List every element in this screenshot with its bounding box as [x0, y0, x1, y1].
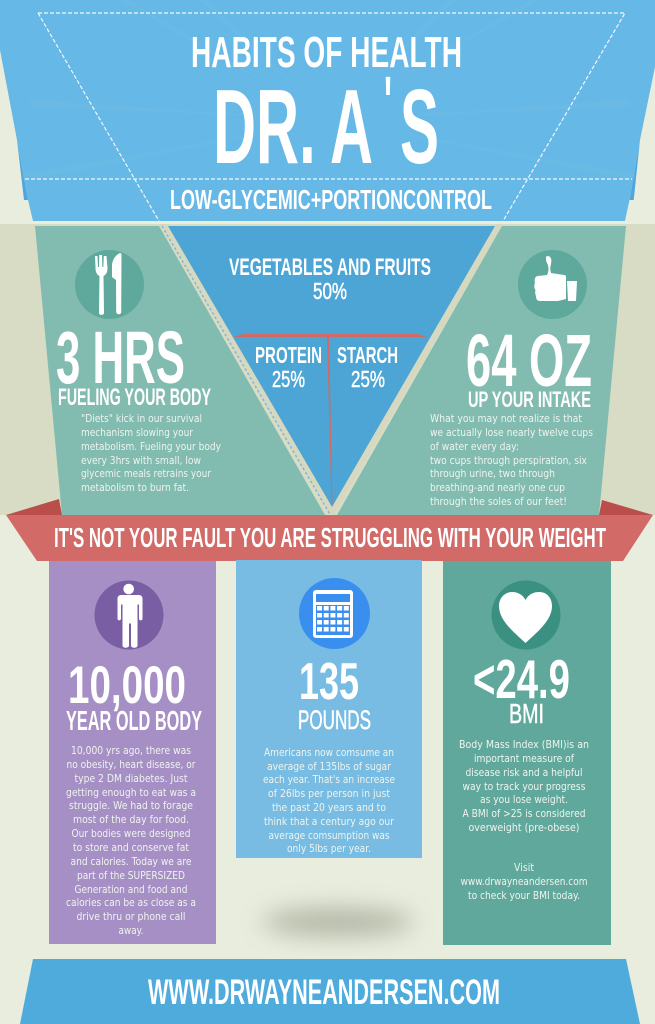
body text: most of the day for food. [73, 814, 189, 826]
stat: 3 hrs: 3 HRS [56, 316, 185, 399]
plate triangle chart [159, 224, 503, 518]
title: Dr. A's: DR. A [213, 68, 373, 186]
divider lines [233, 334, 427, 505]
body text: breathing-and nearly one cup [430, 482, 565, 494]
body text [430, 413, 593, 508]
body text: average of 135lbs of sugar [267, 761, 392, 773]
label: protein: 25% [272, 366, 305, 392]
panel: 135 pounds [236, 560, 422, 858]
body text: Our bodies were designed [72, 828, 190, 840]
header banner [0, 0, 655, 221]
panel: 10,000 year old body [49, 561, 216, 944]
body text: mechanism slowing your [81, 427, 194, 439]
title: Dr. A's: ' [384, 63, 392, 143]
body text: drive thru or phone call [76, 911, 186, 923]
heading: fueling your body: FUELING YOUR BODY [58, 384, 211, 411]
body text: getting enough to eat was a [66, 787, 196, 799]
body text: through urine, two through [430, 468, 555, 480]
body text [66, 745, 196, 937]
body text: no obesity, heart disease, or [66, 759, 196, 771]
body text: of water every day: [430, 441, 519, 453]
body text [263, 747, 395, 855]
body text: to check your BMI today. [468, 890, 580, 902]
body text: way to track your progress [462, 781, 586, 793]
body text: A BMI of >25 is considered [462, 808, 586, 820]
icon: heart [492, 580, 560, 650]
label: vegetables and fruits: 50% [313, 278, 347, 304]
footer banner [20, 959, 640, 1024]
body text: and calories. Today we are [70, 856, 192, 868]
body text: to store and conserve fat [73, 842, 189, 854]
body text: each year. That's an increase [263, 774, 395, 786]
body text: as you lose weight. [480, 794, 568, 806]
body text: important measure of [474, 753, 574, 765]
stat: 10,000: 10,000 [68, 656, 186, 715]
shadow [262, 908, 414, 936]
icon: calculator [299, 578, 370, 649]
heading: BMI: BMI [509, 698, 544, 729]
panel: fueling your body [35, 226, 325, 515]
body text: Generation and food and [74, 884, 188, 896]
body text: overweight (pre-obese) [468, 822, 580, 834]
title: Dr. A's: S [400, 68, 439, 186]
icon: thumbs up [518, 250, 587, 319]
heading: pounds: POUNDS [298, 705, 371, 735]
body text: 10,000 yrs ago, there was [71, 745, 191, 757]
label: starch [337, 342, 398, 392]
icon: person [94, 580, 164, 650]
body text: average comsumption was [268, 830, 390, 842]
label: starch: STARCH [337, 342, 398, 368]
body text: of 26lbs per person in just [268, 788, 390, 800]
body text: think that a century ago our [264, 816, 395, 828]
dashed outline [25, 13, 632, 221]
panel: up your intake [337, 226, 626, 515]
label: protein: PROTEIN [255, 342, 322, 368]
body text: two cups through perspiration, six [430, 455, 587, 467]
body text: every 3hrs with small, low [81, 455, 201, 467]
body text: only 5lbs per year. [287, 843, 371, 855]
body text: metabolism. Fueling your body [81, 441, 221, 453]
body text: www.drwayneandersen.com [460, 876, 588, 888]
body text: metabolism to burn fat. [81, 482, 189, 494]
heading: year old body: YEAR OLD BODY [66, 705, 202, 736]
body text [81, 413, 221, 494]
body text: What you may not realize is that [430, 413, 582, 425]
icon: fork and knife [75, 250, 144, 319]
body text: "Diets" kick in our survival [81, 413, 202, 425]
body text: through the soles of our feet! [430, 496, 567, 508]
stat: 135: 135 [299, 653, 359, 711]
body text: calories can be as close as a [66, 897, 196, 909]
label: vegetables and fruits [229, 254, 431, 304]
body text: disease risk and a helpful [466, 767, 582, 779]
body text: part of the SUPERSIZED [77, 870, 185, 882]
body text: the past 20 years and to [272, 802, 386, 814]
body text [459, 739, 589, 902]
body text: Body Mass Index (BMI)is an [459, 739, 589, 751]
label: starch: 25% [351, 366, 385, 392]
body text: struggle. We had to forage [69, 800, 193, 812]
subtitle: habits of health: HABITS OF HEALTH [191, 28, 462, 77]
stat: <24.9: <24.9 [473, 648, 570, 710]
body text: we actually lose nearly twelve cups [430, 427, 593, 439]
body text: away. [118, 925, 144, 937]
label: protein [255, 342, 322, 392]
label: vegetables and fruits: VEGETABLES AND FRUITS [229, 254, 431, 281]
body text: glycemic meals retrains your [81, 468, 212, 480]
panel: BMI [443, 561, 611, 945]
body text: Visit [514, 862, 534, 874]
ribbon banner [6, 499, 653, 561]
body text: Americans now comsume an [264, 747, 394, 759]
body text: type 2 DM diabetes. Just [74, 773, 188, 785]
heading: up your intake: UP YOUR INTAKE [468, 387, 591, 412]
